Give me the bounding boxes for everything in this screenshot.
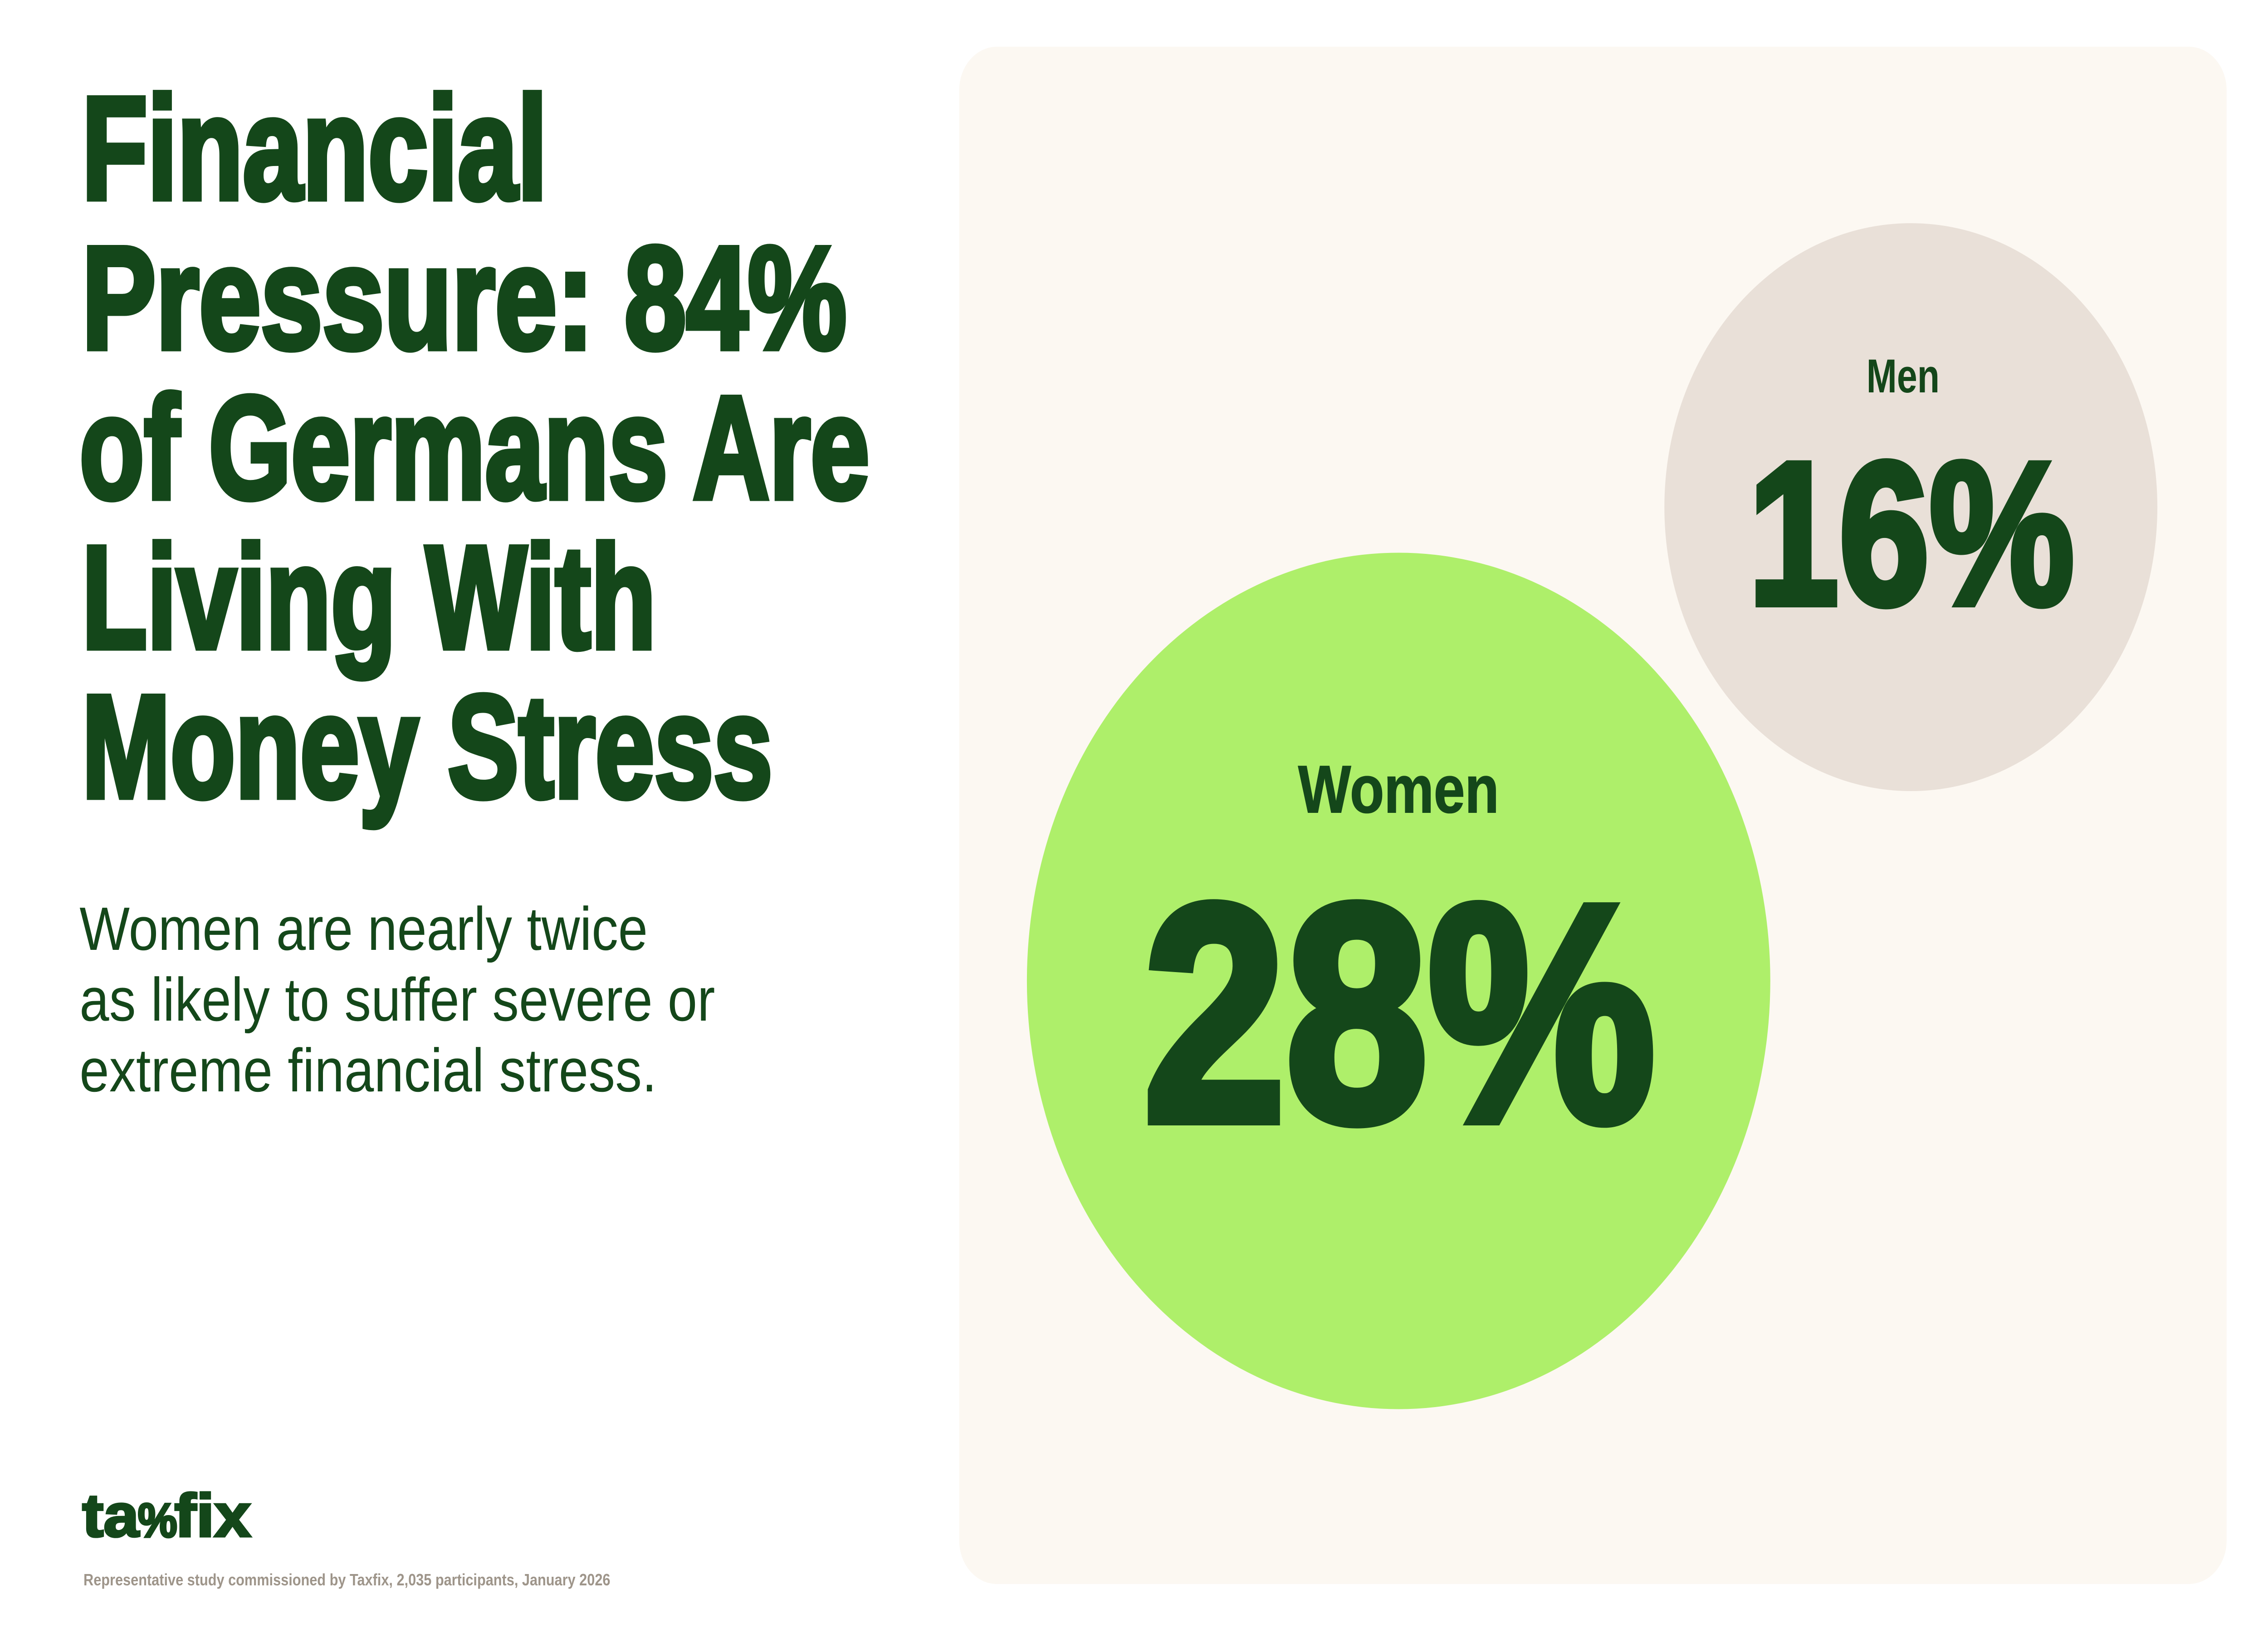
logo: taxfix: fix — [175, 1481, 251, 1550]
subtitle text block: extreme financial stress. — [79, 1036, 657, 1105]
title — [79, 66, 870, 829]
label: men: Men — [1867, 349, 1940, 402]
value: men 16%: 16% — [1748, 420, 2074, 647]
title: Money Stress — [82, 665, 772, 829]
title: Financial — [82, 66, 547, 230]
circle: men — [1664, 223, 2157, 791]
subtitle text block: Women are nearly twice — [79, 895, 648, 963]
title: Living With — [82, 515, 656, 680]
title: Pressure: 84% — [82, 216, 846, 379]
value: women 28%: 28% — [1144, 841, 1655, 1185]
panel: comparison — [959, 47, 2227, 1584]
footnote: source: Representative study commissioned by Taxfix, 2,035 participants, January 2026 — [83, 1571, 610, 1589]
logo: taxfix: % — [138, 1494, 177, 1547]
logo: taxfix: ta — [82, 1481, 140, 1550]
title: of Germans Are — [79, 366, 870, 529]
logo: taxfix — [82, 1481, 251, 1550]
subtitle text block: as likely to suffer severe or — [79, 965, 715, 1034]
subtitle text block — [79, 895, 715, 1105]
label: women: Women — [1298, 753, 1499, 827]
circle: women — [1027, 552, 1770, 1409]
